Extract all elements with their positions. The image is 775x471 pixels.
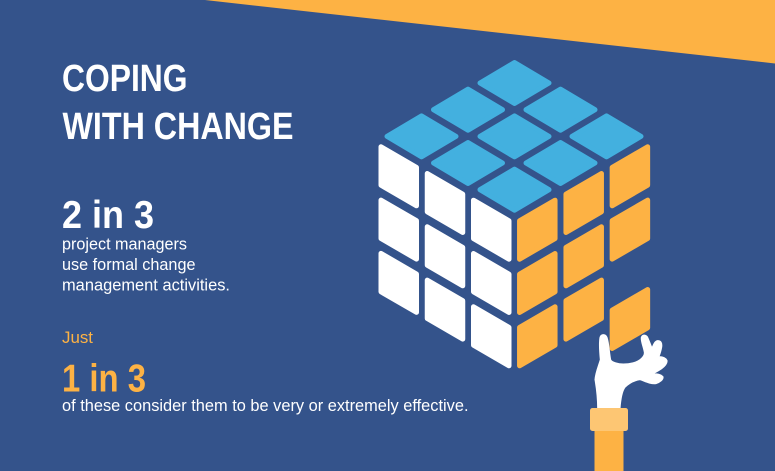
icon: hand and arm holding a cube tile — [590, 335, 667, 471]
statistic: 2 in 3: project managers — [62, 234, 187, 254]
sleeve — [594, 428, 624, 471]
statistic: 2 in 3 — [62, 194, 230, 294]
statistic: just 1 in 3: of these consider them to be very or extremely effective. — [62, 396, 468, 415]
statistic: 2 in 3: management activities. — [62, 276, 230, 294]
cube — [381, 62, 648, 366]
cube top face — [387, 62, 641, 210]
title: COPING — [62, 58, 188, 100]
cube right face with one displaced tile — [520, 147, 648, 366]
statistic: just 1 in 3 — [62, 328, 468, 415]
title: WITH CHANGE — [62, 106, 294, 148]
hand — [595, 335, 667, 409]
orange top banner — [205, 0, 775, 64]
statistic: 2 in 3: use formal change — [62, 255, 196, 274]
displaced tile — [612, 290, 648, 348]
statistic: 2 in 3: 2 in 3 — [62, 194, 154, 237]
statistic: just 1 in 3: Just — [62, 328, 93, 347]
cube left face — [381, 147, 509, 366]
title — [62, 58, 294, 148]
statistic: just 1 in 3: 1 in 3 — [62, 358, 146, 400]
cuff — [590, 408, 628, 431]
